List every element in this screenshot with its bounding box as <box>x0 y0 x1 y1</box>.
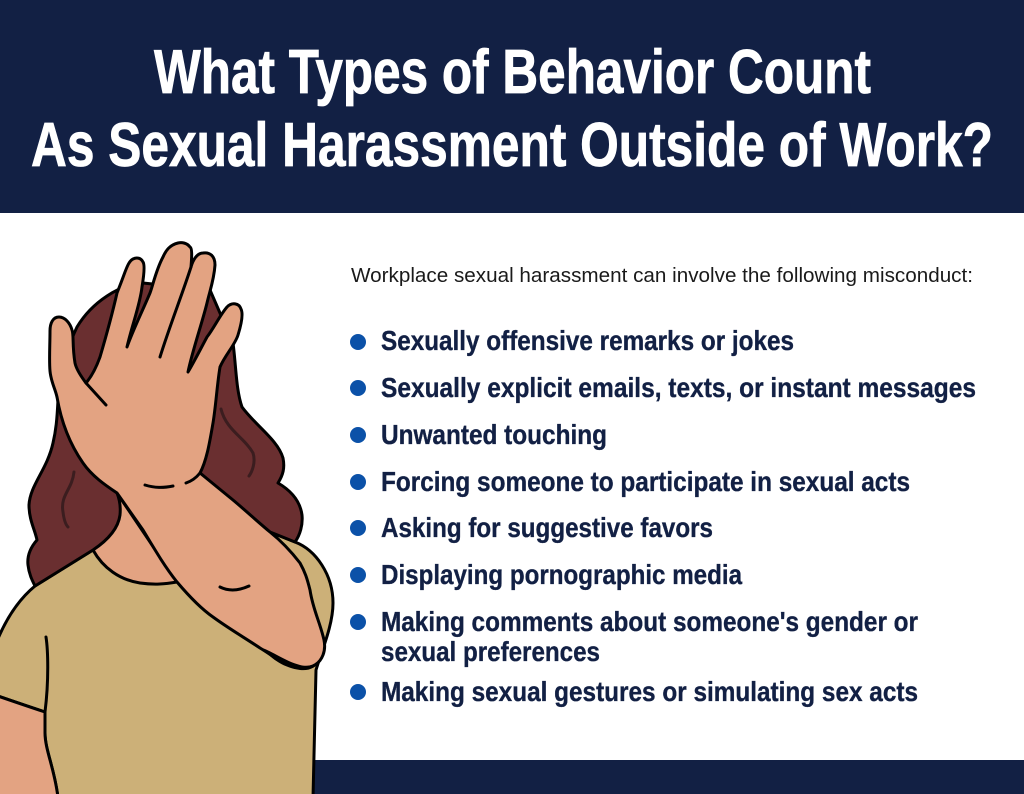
hair strands <box>63 409 254 527</box>
bullet list <box>350 325 976 707</box>
hand and forearm <box>50 243 325 668</box>
item 6: Displaying pornographic media <box>381 559 742 590</box>
hair <box>28 283 302 586</box>
arm <box>0 695 58 794</box>
neck <box>93 493 177 584</box>
item 4: Forcing someone to participate in sexual acts <box>381 466 910 497</box>
forearm shadow <box>262 648 321 670</box>
item 8: Making sexual gestures or simulating sex acts <box>381 676 918 707</box>
item 7: sexual preferences <box>381 636 600 667</box>
item 5: Asking for suggestive favors <box>381 512 713 543</box>
header band <box>0 0 1024 213</box>
title <box>31 38 993 180</box>
footer band <box>314 760 1024 794</box>
item 1: Sexually offensive remarks or jokes <box>381 325 794 356</box>
intro text: Workplace sexual harassment can involve the following misconduct: <box>351 265 973 287</box>
item 7: Making comments about someone's gender or <box>381 606 918 637</box>
sleeve crease <box>45 637 48 712</box>
item 3: Unwanted touching <box>381 419 607 450</box>
shirt <box>0 532 333 794</box>
finger and palm lines <box>86 267 249 590</box>
illustration: woman raising hand <box>0 243 333 794</box>
item 7 <box>350 606 918 667</box>
